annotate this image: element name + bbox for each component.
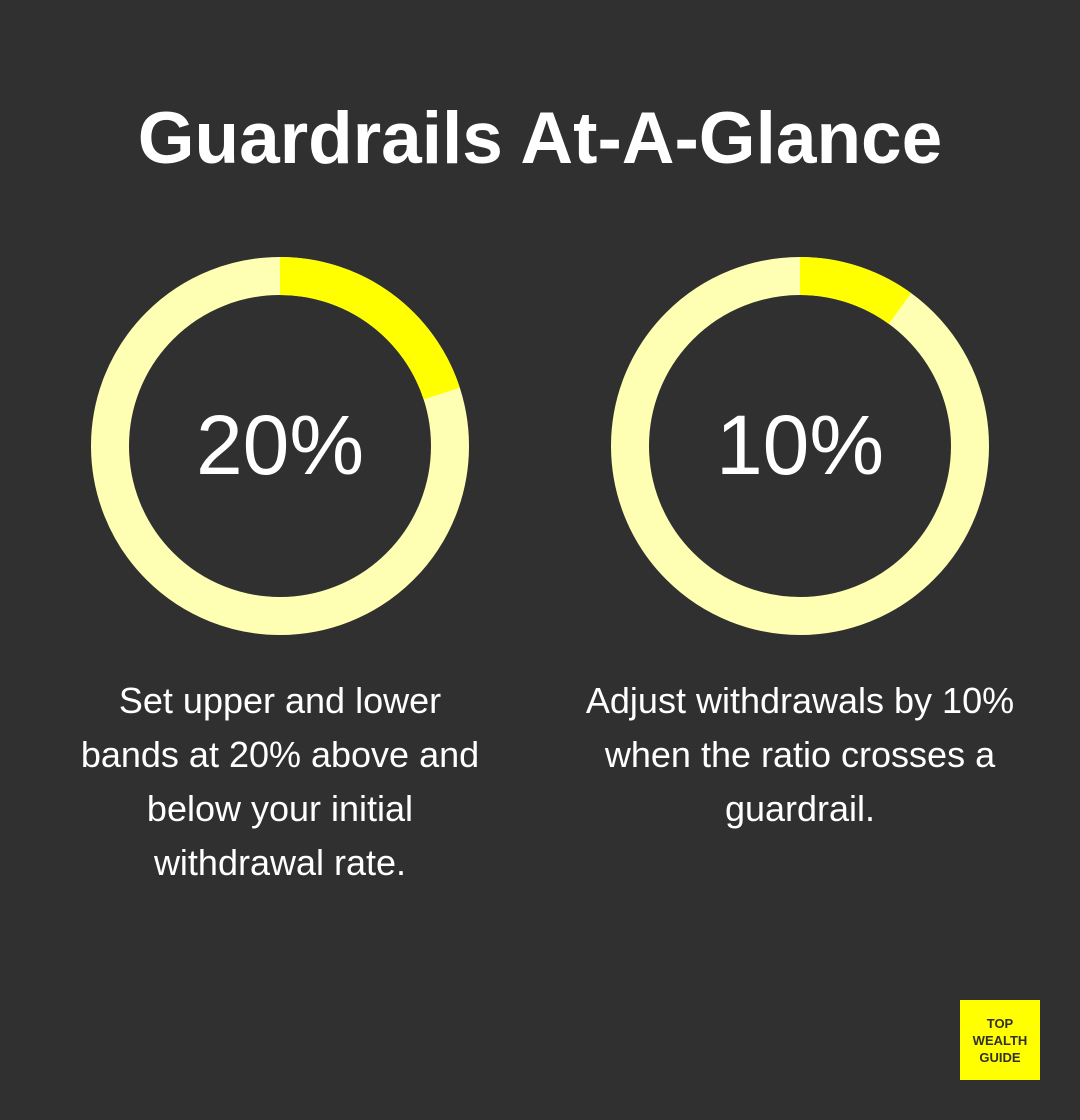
- chart: donut 20%: 20%: [196, 398, 364, 492]
- text: right description: guardrail.: [725, 788, 875, 829]
- chart: donut 20%: [91, 257, 469, 635]
- text: left description: Set upper and lower: [119, 680, 441, 721]
- logo: WEALTH: [973, 1032, 1027, 1048]
- chart: donut 10%: [611, 257, 989, 635]
- text: left description: withdrawal rate.: [154, 842, 406, 883]
- text: left description: below your initial: [147, 788, 413, 829]
- text: left description: [81, 680, 479, 883]
- logo: TOP: [987, 1016, 1013, 1030]
- text: right description: when the ratio crosses a: [605, 734, 995, 775]
- logo: GUIDE: [979, 1050, 1021, 1064]
- text: left description: bands at 20% above and: [81, 734, 479, 775]
- title: Guardrails At-A-Glance: [138, 98, 942, 179]
- text: right description: Adjust withdrawals by 10%: [586, 680, 1014, 721]
- chart: donut 10%: 10%: [716, 398, 884, 492]
- text: right description: [586, 680, 1014, 829]
- logo: [960, 1000, 1040, 1080]
